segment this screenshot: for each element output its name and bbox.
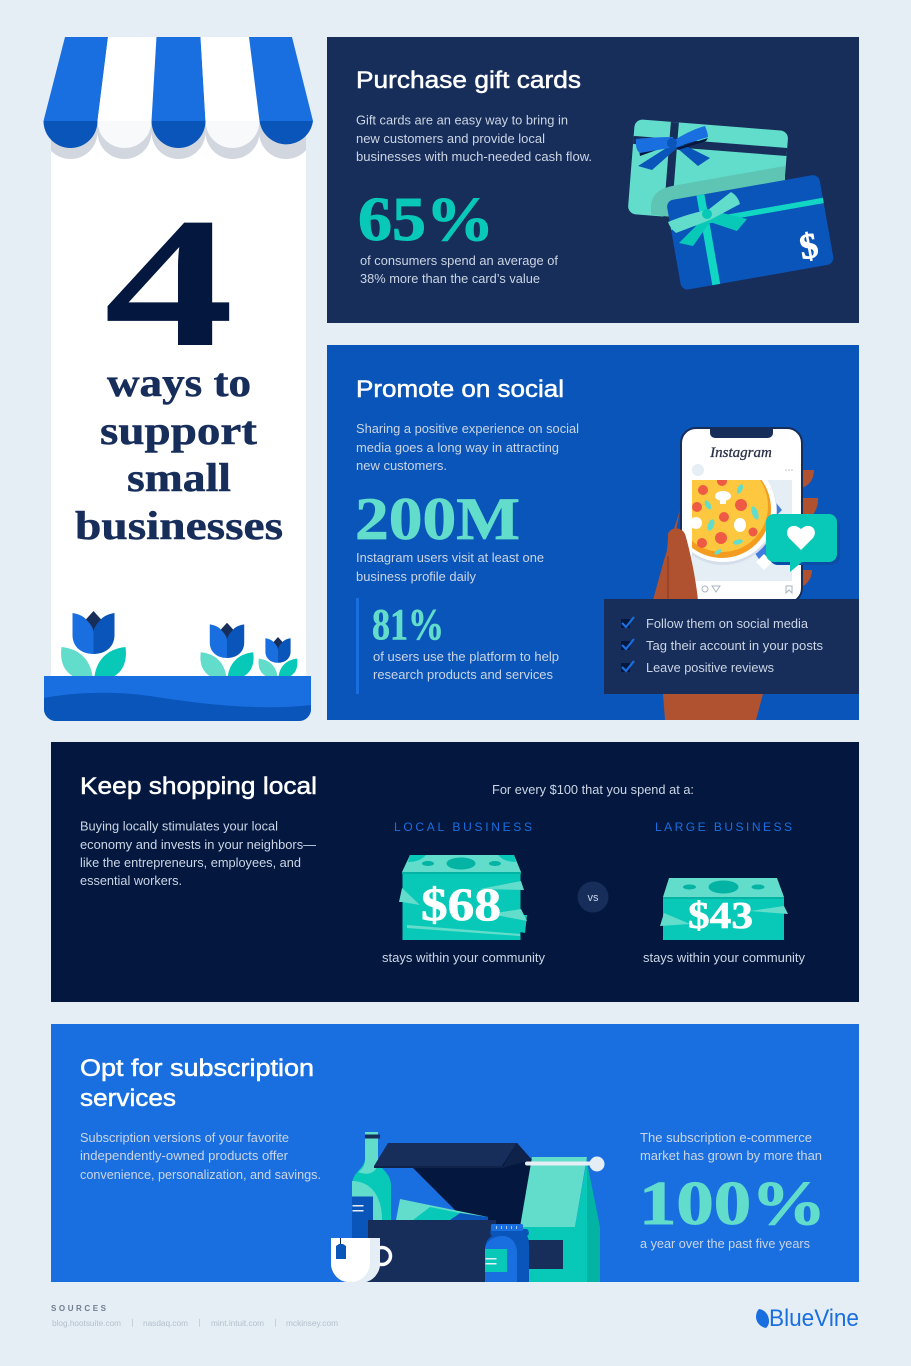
- text block: Sharing a positive experience on social: [356, 421, 579, 436]
- app name: Instagram: [709, 445, 772, 461]
- stat caption: business profile daily: [356, 569, 476, 584]
- stat caption: [360, 253, 558, 286]
- check items: Tag their account in your posts: [646, 638, 823, 653]
- icon: tulips: [61, 611, 297, 676]
- stat: 65%: 65%: [358, 186, 494, 254]
- heading: Opt for subscription: [80, 1055, 314, 1082]
- check items: [621, 616, 823, 675]
- stat caption: a year over the past five years: [640, 1236, 810, 1251]
- amount: $43: $43: [688, 895, 753, 937]
- panel: opt for subscription services: [51, 1024, 859, 1282]
- stat caption: 38% more than the card’s value: [360, 271, 540, 286]
- box lid interior: [413, 1143, 532, 1225]
- panel: promote on social: [327, 345, 859, 720]
- column label: local: LOCAL BUSINESS: [394, 820, 532, 834]
- fingers: [800, 470, 818, 588]
- stat caption: research products and services: [373, 667, 553, 682]
- caption: local: stays within your community: [382, 950, 545, 965]
- panel: storefront: [44, 37, 313, 721]
- stat: 81%: 81%: [372, 600, 444, 649]
- panel: checklist: [604, 599, 859, 694]
- text block: market growth: market has grown by more than: [640, 1148, 822, 1163]
- text block: [356, 421, 579, 473]
- card shadow: [651, 166, 785, 220]
- text block: [80, 1130, 321, 1182]
- text block: new customers and provide local: [356, 131, 545, 146]
- heading: [80, 1055, 314, 1112]
- snack pack: [396, 1199, 488, 1220]
- text block: independently-owned products offer: [80, 1148, 289, 1163]
- stat caption: Instagram users visit at least one: [356, 550, 544, 565]
- source links: mckinsey.com: [286, 1319, 338, 1328]
- back card: [628, 119, 789, 226]
- heading: Purchase gift cards: [356, 67, 581, 94]
- headline: businesses: [75, 503, 283, 548]
- icon: money stack $68: [399, 855, 527, 940]
- headline: small: [127, 455, 231, 500]
- illustration: hand holding phone: [653, 428, 840, 720]
- icon: gift cards: [628, 119, 834, 291]
- headline: [75, 360, 283, 548]
- palm and wrist: [653, 510, 763, 720]
- text block: [356, 112, 592, 164]
- heading: Keep shopping local: [80, 773, 317, 800]
- vs badge: vs: [588, 892, 599, 904]
- text block: new customers.: [356, 458, 447, 473]
- planter box: [44, 676, 311, 721]
- accent bar: [356, 598, 359, 694]
- stat caption: [356, 550, 544, 584]
- box body: [368, 1220, 496, 1282]
- headline: ways to: [107, 360, 251, 405]
- teal bow: [668, 192, 747, 246]
- logo: BlueVine: BlueVine: [769, 1305, 859, 1332]
- panel: keep shopping local: [51, 742, 859, 1002]
- headline: support: [100, 408, 258, 453]
- photo of pizza: [692, 480, 792, 581]
- source links: blog.hootsuite.com: [52, 1319, 121, 1328]
- sources: [51, 1304, 338, 1328]
- comparison intro: For every $100 that you spend at a:: [492, 782, 694, 797]
- vs badge: [578, 882, 608, 912]
- big number 4: 4: [104, 180, 234, 386]
- caption: large: stays within your community: [643, 950, 805, 965]
- awning: [44, 37, 313, 159]
- text block: market growth: [640, 1130, 822, 1163]
- bottle: [352, 1132, 391, 1262]
- box lid: [374, 1143, 532, 1168]
- tea mug: [331, 1238, 390, 1282]
- source links: nasdaq.com: [143, 1319, 188, 1328]
- jar: [485, 1224, 529, 1282]
- icon: heart speech bubble: [766, 514, 840, 572]
- icon: money stack $43: [660, 878, 788, 940]
- text block: Subscription versions of your favorite: [80, 1130, 289, 1145]
- text block: media goes a long way in attracting: [356, 440, 559, 455]
- source links: mint.intuit.com: [211, 1319, 264, 1328]
- stat caption: of consumers spend an average of: [360, 253, 558, 268]
- check items: Follow them on social media: [646, 616, 809, 631]
- text block: like the entrepreneurs, employees, and: [80, 855, 301, 870]
- amount: $68: $68: [421, 879, 501, 931]
- stat caption: of users use the platform to help: [373, 649, 559, 664]
- stat: 200M: 200M: [355, 486, 520, 552]
- post action icons: [702, 586, 792, 593]
- text block: Buying locally stimulates your local: [80, 818, 278, 834]
- illustration: subscription box: [331, 1132, 604, 1282]
- blue bow: [636, 126, 710, 170]
- text block: businesses with much-needed cash flow.: [356, 149, 592, 164]
- text block: essential workers.: [80, 873, 182, 888]
- phone: [669, 428, 802, 603]
- column label: large: LARGE BUSINESS: [655, 820, 792, 834]
- front card: [666, 174, 834, 291]
- sources: SOURCES: [51, 1304, 107, 1313]
- text block: Gift cards are an easy way to bring in: [356, 112, 568, 128]
- heading: services: [80, 1085, 176, 1112]
- panel: purchase gift cards: [327, 37, 859, 323]
- text block: market growth: The subscription e-commerce: [640, 1130, 812, 1145]
- check items: Leave positive reviews: [646, 660, 774, 675]
- text block: convenience, personalization, and savings.: [80, 1167, 321, 1182]
- source links: [52, 1319, 338, 1328]
- dollar sign: $: [796, 225, 821, 267]
- text block: [80, 818, 316, 888]
- stat caption: [373, 649, 559, 682]
- shop wall: [51, 121, 306, 680]
- stat: 100%: 100%: [639, 1170, 826, 1238]
- thumb: [654, 528, 698, 600]
- text block: economy and invests in your neighbors—: [80, 837, 316, 852]
- coffee bag: [520, 1156, 604, 1282]
- heading: Promote on social: [356, 376, 564, 403]
